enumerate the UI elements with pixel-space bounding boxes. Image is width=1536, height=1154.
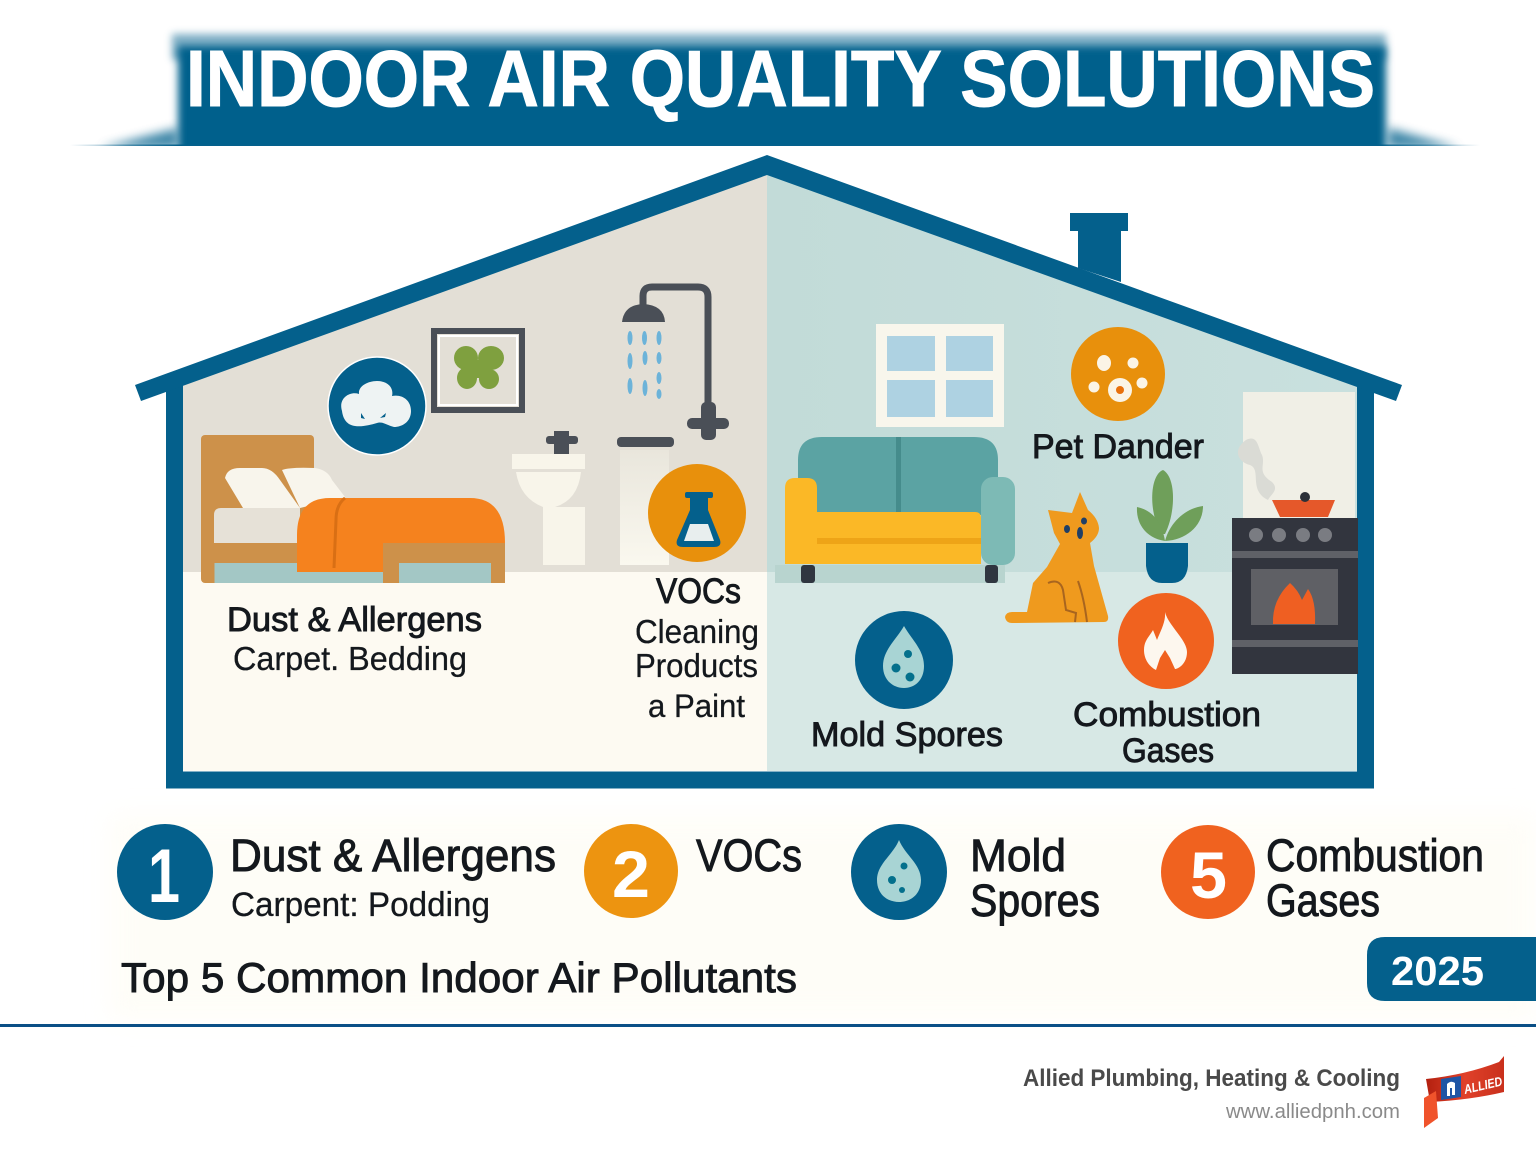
bottom legend panel [110, 815, 1536, 1020]
legend item: dust and allergens: 1 [148, 834, 180, 919]
legend item: combustion gases: Combustion [1266, 830, 1484, 881]
label: mold spores: Mold Spores [811, 716, 1003, 754]
legend item: mold spores: Mold [970, 830, 1066, 881]
legend item: mold spores: Spores [970, 875, 1100, 926]
footer credit [1023, 1065, 1400, 1123]
icon: VOC flask [648, 464, 746, 562]
year badge [1367, 937, 1536, 1001]
label: dust and allergens [227, 601, 482, 677]
potted plant [1137, 470, 1203, 583]
left room floor [183, 572, 767, 771]
framed picture [434, 331, 522, 410]
logo ribbon [1424, 1056, 1504, 1128]
legend item: dust and allergens: Carpent: Podding [231, 886, 490, 924]
label: combustion gases: Gases [1122, 732, 1214, 770]
legend item: dust and allergens [117, 824, 556, 924]
icon: combustion flame [1118, 593, 1214, 689]
label: VOCs: VOCs [656, 572, 741, 611]
footer credit: www.alliedpnh.com [1225, 1101, 1400, 1123]
title banner [70, 34, 1480, 161]
roof [135, 155, 1402, 401]
window [876, 324, 1004, 427]
bed [201, 435, 505, 583]
icon: pet dander paw [1071, 327, 1165, 421]
label: VOCs: a Paint [648, 688, 745, 724]
legend item: mold spores [851, 824, 1100, 926]
label: dust and allergens: Dust & Allergens [227, 601, 482, 639]
right room wall [767, 165, 1357, 572]
legend item: combustion gases: Gases [1266, 875, 1380, 926]
icon: dust cloud [328, 357, 426, 455]
legend item: VOCs: VOCs [696, 830, 802, 881]
legend item: combustion gases [1161, 825, 1484, 926]
house walls outline [174, 385, 1366, 780]
footer credit: Allied Plumbing, Heating & Cooling [1023, 1065, 1400, 1092]
icon: mold drop [855, 611, 953, 709]
legend item: VOCs [584, 824, 802, 918]
label: VOCs: Products [635, 647, 758, 684]
legend item: combustion gases: 5 [1190, 838, 1227, 912]
logo ribbon: ALLIED [1461, 1073, 1504, 1097]
left room wall [183, 165, 767, 572]
stove with pot [1232, 392, 1358, 674]
title text: INDOOR AIR QUALITY SOLUTIONS [186, 34, 1375, 123]
label: combustion gases [1073, 696, 1261, 770]
cat [1005, 492, 1108, 623]
label: VOCs [635, 572, 759, 724]
year badge: 2025 [1391, 948, 1484, 994]
right room floor [767, 572, 1357, 771]
house illustration [135, 155, 1402, 780]
label: pet dander: Pet Dander [1032, 428, 1204, 466]
sofa [775, 437, 1015, 583]
legend item: dust and allergens: Dust & Allergens [230, 830, 556, 881]
sink [512, 431, 585, 565]
shower [617, 287, 729, 565]
label: combustion gases: Combustion [1073, 696, 1261, 734]
legend heading: Top 5 Common Indoor Air Pollutants [121, 954, 797, 1001]
legend item: VOCs: 2 [612, 837, 650, 911]
label: VOCs: Cleaning [635, 613, 759, 650]
label: dust and allergens: Carpet. Bedding [233, 640, 467, 677]
chimney [1070, 213, 1128, 282]
